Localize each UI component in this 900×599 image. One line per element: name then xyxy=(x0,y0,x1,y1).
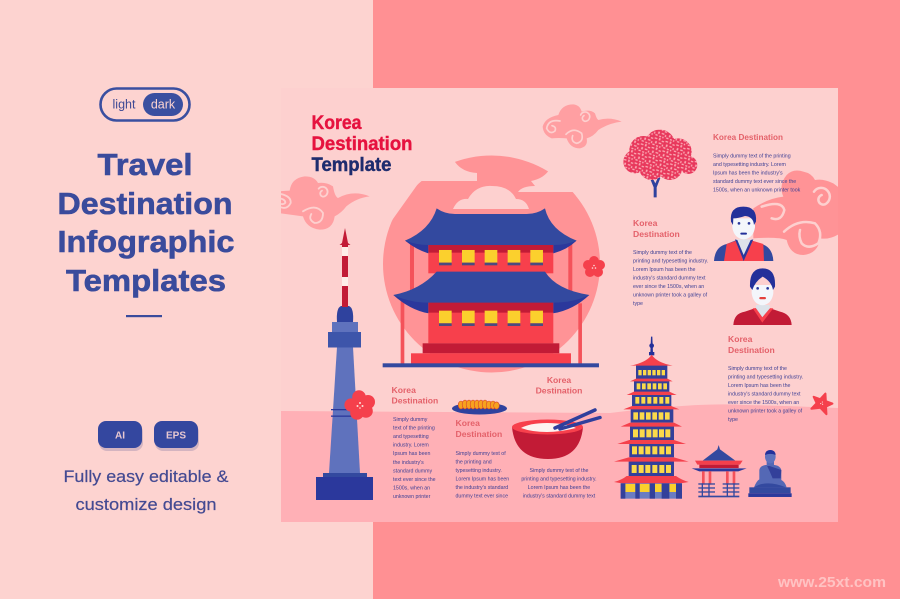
text block: right section: ever since the 1500s, when an xyxy=(728,400,799,406)
badge: AI xyxy=(98,421,143,451)
icon: pagoda xyxy=(614,337,689,499)
text block: tower section: text ever since the xyxy=(393,477,436,483)
text block: tower section: Korea xyxy=(392,385,416,395)
text block: right section: Korea xyxy=(728,334,753,344)
text block: bowl section xyxy=(521,375,597,500)
text block: tower section: unknown printer xyxy=(393,494,431,500)
badge: EPS: EPS xyxy=(166,430,186,442)
text block: portrait section: Destination xyxy=(633,229,680,239)
lower storey xyxy=(393,272,589,343)
text block: food section: Lorem Ipsum has been xyxy=(456,476,509,482)
text block: portrait section: printing and typesetting industry. xyxy=(633,258,708,264)
text block: tree section: and typesetting industry. Lorem xyxy=(713,162,786,168)
cloud: left xyxy=(278,176,370,230)
text block: tree section: Simply dummy text of the printing xyxy=(713,154,791,160)
heading: main title: Infographic xyxy=(58,224,234,259)
cloud: top centre xyxy=(543,104,622,148)
text block: right section: Destination xyxy=(728,345,775,355)
text block: food section: Destination xyxy=(456,429,502,439)
text block: right section: Lorem Ipsum has been the xyxy=(728,383,791,389)
text block: portrait section xyxy=(633,218,708,307)
text block: tower section: Simply dummy xyxy=(393,417,428,423)
icon: woman portrait xyxy=(733,268,792,325)
watermark: www.25xt.com xyxy=(777,575,886,591)
text block: tree section: standard dummy text ever since the xyxy=(713,179,796,185)
text block: bowl section: Simply dummy text of the xyxy=(530,468,589,474)
temple xyxy=(383,208,599,367)
text block: tower section: Ipsum has been xyxy=(393,451,430,457)
upper storey xyxy=(405,208,577,273)
text block: portrait section: unknown printer took a galley of xyxy=(633,292,708,298)
text block: tree section xyxy=(713,132,801,194)
text block: tower section: and typesetting xyxy=(393,434,429,440)
text block: tower section: industry. Lorem xyxy=(393,443,429,449)
text block: tree section: Korea Destination xyxy=(713,132,783,142)
text block: tower section: standard dummy xyxy=(393,468,432,474)
text block: tower section xyxy=(392,385,438,500)
text: editable note: customize design xyxy=(76,495,216,514)
flower: beside sun xyxy=(583,256,605,277)
title: Korea Destination Template: Destination xyxy=(312,134,412,155)
text block: tree section: 1500s, when an unknown printer took xyxy=(713,188,801,194)
cloud: right xyxy=(753,171,840,255)
text block: portrait section: Lorem Ipsum has been the xyxy=(633,267,696,273)
text block: right section xyxy=(728,334,803,423)
text: editable note: Fully easy editable & xyxy=(64,467,229,486)
background: right salmon block xyxy=(373,0,900,599)
pillars xyxy=(401,243,582,364)
text block: bowl section: printing and typesetting industry. xyxy=(521,476,597,482)
text block: food section: the printing and xyxy=(456,460,492,466)
text block: food section: Simply dummy text of xyxy=(456,451,506,457)
text block: right section: industry's standard dummy text xyxy=(728,392,801,398)
icon: cherry tree xyxy=(623,130,698,198)
text block: portrait section: Simply dummy text of the xyxy=(633,250,692,256)
temple base xyxy=(383,343,599,367)
text: editable note xyxy=(64,467,229,514)
heading: main title: Templates xyxy=(66,263,226,298)
icon: man portrait xyxy=(714,207,773,261)
text block: bowl section: Lorem Ipsum has been the xyxy=(528,485,590,491)
title: Korea Destination Template: Template xyxy=(312,155,392,176)
ground floor xyxy=(621,483,682,499)
text block: bowl section: industry's standard dummy text xyxy=(523,494,596,500)
icon: rice bowl with chopsticks xyxy=(512,410,600,459)
toggle: light dark: dark xyxy=(151,98,176,112)
badge: AI: AI xyxy=(115,430,125,442)
text block: food section: Korea xyxy=(456,418,480,428)
title: Korea Destination Template: Korea xyxy=(312,113,362,134)
text block: portrait section: type xyxy=(633,301,643,307)
text block: right section: type xyxy=(728,417,738,423)
text block: bowl section: Destination xyxy=(536,386,582,396)
text block: tower section: the industry's xyxy=(393,460,424,466)
sun disc with cloud cut-outs xyxy=(378,150,610,372)
text block: food section: the industry's standard xyxy=(456,485,508,491)
text block: right section: Simply dummy text of the xyxy=(728,366,787,372)
text block: bowl section: Korea xyxy=(547,375,571,385)
text block: food section xyxy=(456,418,509,500)
text block: right section: printing and typesetting industry. xyxy=(728,374,803,380)
text block: tower section: text of the printing xyxy=(393,426,435,432)
icon: food plate xyxy=(452,400,507,414)
toggle: light dark xyxy=(100,88,190,120)
text block: portrait section: ever since the 1500s, when an xyxy=(633,284,704,290)
icon: pavilion xyxy=(692,445,747,497)
text block: food section: typesetting industry. xyxy=(456,468,502,474)
tower xyxy=(316,228,373,500)
heading: main title xyxy=(58,147,234,298)
text block: portrait section: Korea xyxy=(633,218,658,228)
text block: tower section: Destination xyxy=(392,396,438,406)
floors xyxy=(629,365,674,477)
text block: food section: dummy text ever since xyxy=(456,494,508,500)
windows xyxy=(632,370,671,473)
text block: portrait section: industry's standard dummy text xyxy=(633,276,706,282)
toggle: light dark: light xyxy=(113,98,136,112)
roofs xyxy=(614,355,689,483)
text block: right section: unknown printer took a galley of xyxy=(728,408,803,414)
flower: on tower xyxy=(344,390,375,420)
text block: tower section: 1500s, when an xyxy=(393,485,430,491)
panel: left cover column xyxy=(58,88,234,514)
flower: right xyxy=(810,390,835,415)
text block: tree section: Ipsum has been the industry's xyxy=(713,170,783,176)
heading: main title: Destination xyxy=(58,186,232,221)
title: Korea Destination Template xyxy=(312,113,412,176)
icon: buddha statue xyxy=(748,450,792,497)
heading: main title: Travel xyxy=(98,147,192,182)
badge: EPS xyxy=(154,421,199,451)
panel: infographic sheet xyxy=(281,88,838,522)
